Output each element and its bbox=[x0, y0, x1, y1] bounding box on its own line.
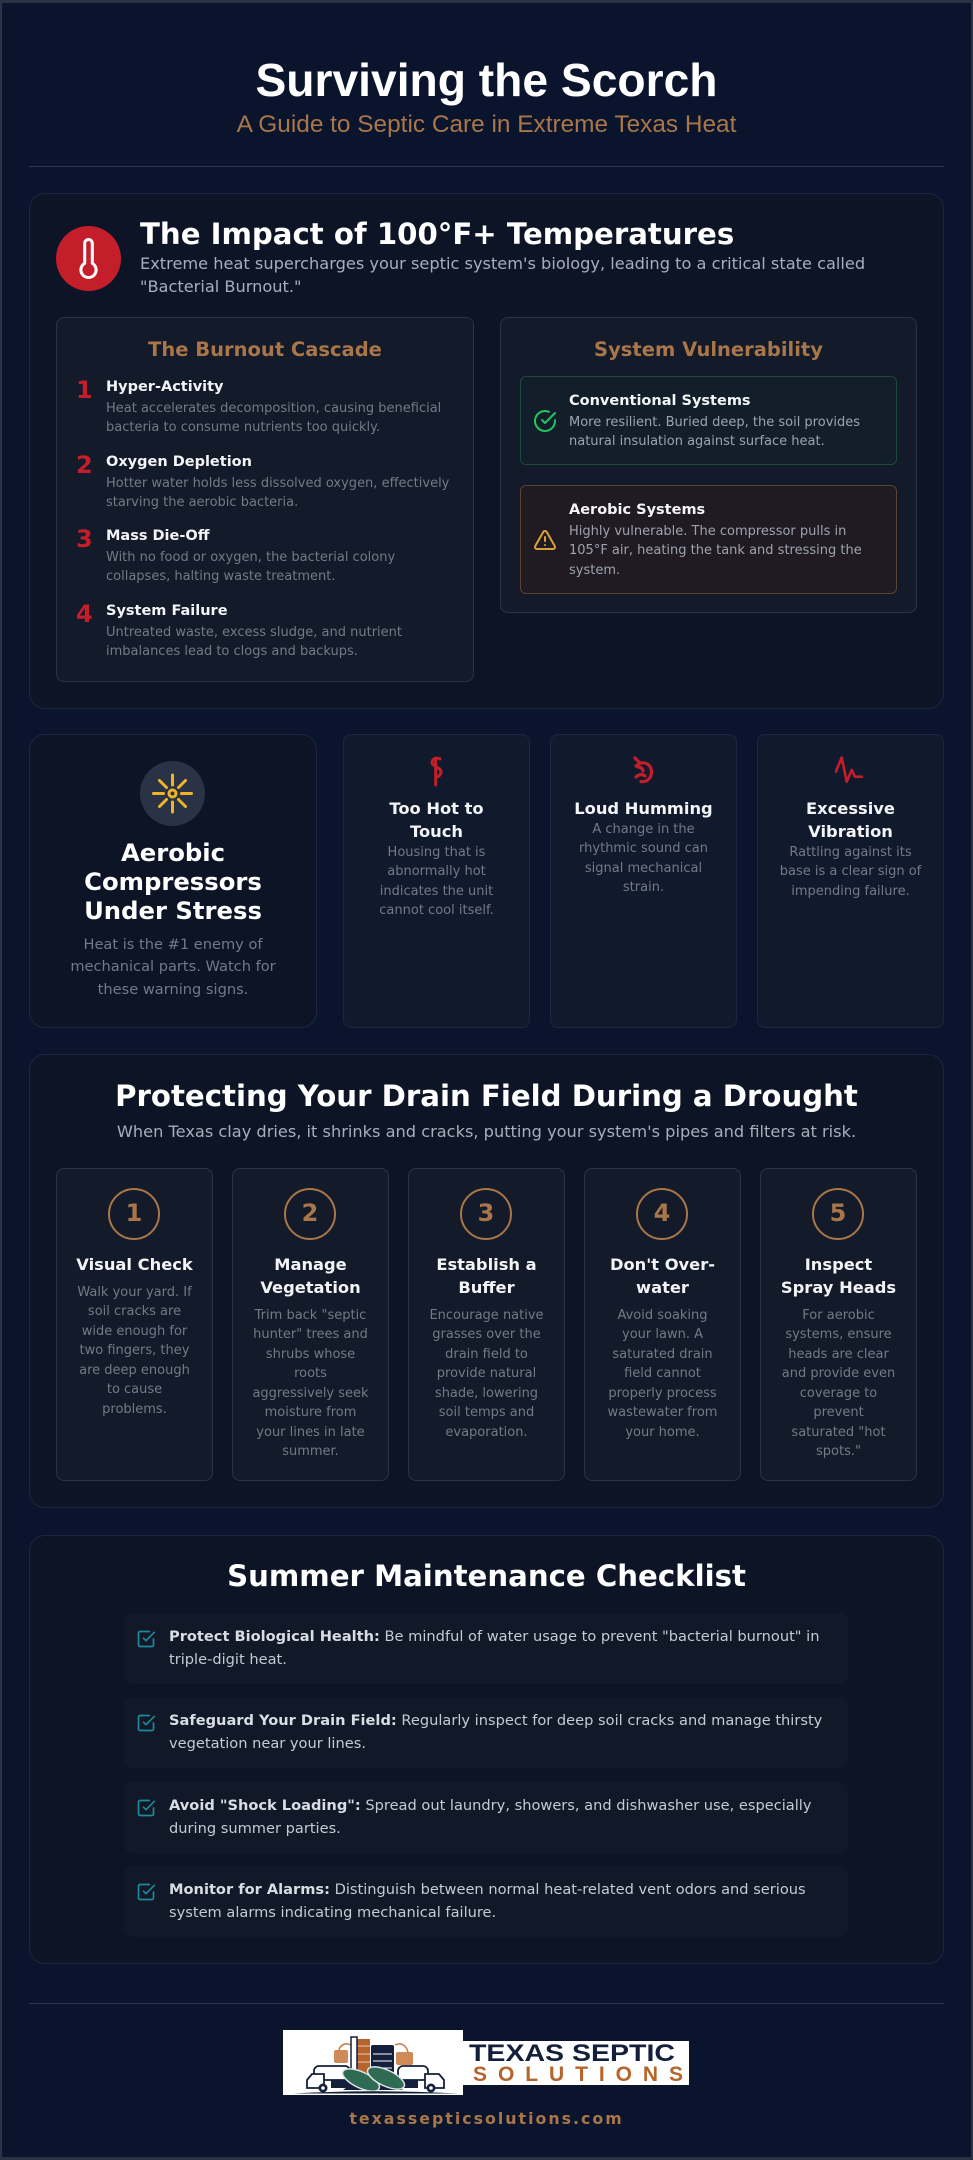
text: visual check: soil cracks are bbox=[88, 1304, 181, 1319]
checklist text: biological health: triple-digit heat. bbox=[169, 1651, 287, 1668]
number 2: 2 bbox=[302, 1199, 318, 1227]
logo wordmark box bbox=[463, 2041, 689, 2086]
number 3: 3 bbox=[478, 1199, 494, 1227]
title: too hot to touch: Too Hot to bbox=[389, 799, 484, 818]
step text: system failure bbox=[106, 624, 402, 659]
step title: mass die-off: Mass Die-Off bbox=[106, 528, 209, 544]
checklist text: alarms: system alarms indicating mechanical failure. bbox=[169, 1904, 496, 1921]
title: conventional systems: Conventional Systems bbox=[569, 392, 751, 408]
card: establish a buffer bbox=[408, 1168, 565, 1481]
text: aerobic compressors bbox=[70, 936, 276, 998]
text: aerobic systems: system. bbox=[569, 562, 620, 578]
text: too hot to touch: abnormally hot bbox=[387, 864, 486, 879]
text: don't over-water bbox=[608, 1308, 717, 1440]
logo bbox=[283, 2030, 689, 2095]
card: loud humming bbox=[550, 734, 737, 1028]
card: inspect spray heads bbox=[760, 1168, 917, 1481]
text: don't over-water: your lawn. A bbox=[622, 1327, 703, 1342]
heading: system vulnerability: System Vulnerability bbox=[594, 338, 823, 361]
title: establish a buffer: Establish a bbox=[436, 1255, 537, 1274]
number 5 bbox=[812, 1188, 864, 1240]
step text: mass die-off bbox=[106, 550, 395, 584]
step title: oxygen depletion: Oxygen Depletion bbox=[106, 454, 252, 470]
checklist row: biological health bbox=[124, 1613, 848, 1684]
checklist text: drain field: vegetation near your lines. bbox=[169, 1735, 366, 1752]
title: loud humming: Loud Humming bbox=[574, 799, 713, 818]
number 2 bbox=[284, 1188, 336, 1240]
text: excessive vibration: base is a clear sign of bbox=[780, 864, 921, 879]
step text: system failure: imbalances lead to clogs and backups. bbox=[106, 644, 358, 659]
text: establish a buffer: soil temps and bbox=[439, 1405, 534, 1420]
subheading: drain field: When Texas clay dries, it shrinks and cracks, putting your system's pipes and filters at risk. bbox=[117, 1122, 856, 1141]
checklist text: biological health bbox=[169, 1628, 819, 1668]
step text: hyper-activity: bacteria to consume nutrients too quickly. bbox=[106, 420, 380, 435]
text: manage vegetation: aggressively seek bbox=[252, 1386, 369, 1400]
text: manage vegetation: your lines in late bbox=[256, 1424, 365, 1440]
title: excessive vibration bbox=[806, 799, 895, 841]
heading: checklist: Summer Maintenance Checklist bbox=[227, 1559, 746, 1593]
title: don't over-water: Don't Over- bbox=[610, 1255, 715, 1274]
logo wordmark box: TEXAS SEPTIC bbox=[469, 2041, 675, 2067]
checklist text: shock loading: Avoid "Shock Loading": Spread out laundry, showers, and dishwasher use, especially bbox=[169, 1797, 812, 1814]
intro text: "Bacterial Burnout." bbox=[140, 277, 302, 296]
title: aerobic systems: Aerobic Systems bbox=[569, 502, 705, 518]
website url: texassepticsolutions.com bbox=[349, 2109, 624, 2128]
heading: impact: The Impact of 100°F+ Temperatures bbox=[140, 217, 734, 251]
heading: aerobic compressors bbox=[84, 838, 262, 925]
text: conventional systems: natural insulation against surface heat. bbox=[569, 434, 825, 449]
step title: hyper-activity: Hyper-Activity bbox=[106, 379, 224, 395]
number 4 bbox=[636, 1188, 688, 1240]
icon: check circle bbox=[534, 410, 556, 432]
checklist text: alarms: Monitor for Alarms: Distinguish between normal heat-related vent odors and serious bbox=[169, 1881, 806, 1898]
text: conventional systems bbox=[569, 414, 860, 449]
text: visual check: to cause bbox=[107, 1382, 162, 1397]
title: excessive vibration: Vibration bbox=[808, 822, 893, 841]
text: too hot to touch bbox=[379, 844, 494, 918]
card: too hot to touch bbox=[343, 734, 530, 1028]
number 4: 4 bbox=[654, 1199, 670, 1227]
intro text: Extreme heat supercharges your septic system's biology, leading to a critical state called bbox=[140, 254, 865, 273]
text: establish a buffer: grasses over the bbox=[432, 1327, 541, 1342]
checklist text: drain field: Safeguard Your Drain Field: Regularly inspect for deep soil cracks and manage thirsty bbox=[169, 1712, 822, 1729]
icon: vibration pulse bbox=[835, 756, 863, 783]
text: inspect spray heads bbox=[782, 1308, 895, 1459]
icon: checkbox 3 bbox=[138, 1800, 156, 1816]
title: too hot to touch: Touch bbox=[410, 822, 463, 841]
subtitle: A Guide to Septic Care in Extreme Texas Heat bbox=[237, 111, 736, 138]
text: visual check: two fingers, they bbox=[80, 1343, 189, 1358]
icon: checkbox 1 bbox=[138, 1630, 156, 1648]
text: manage vegetation bbox=[252, 1308, 369, 1459]
text: establish a buffer: drain field to bbox=[445, 1346, 528, 1362]
text: visual check: are deep enough bbox=[79, 1362, 190, 1378]
card: manage vegetation bbox=[232, 1168, 389, 1481]
checklist text: shock loading: during summer parties. bbox=[169, 1820, 341, 1837]
step text: hyper-activity bbox=[106, 400, 441, 435]
text: don't over-water: saturated drain bbox=[612, 1346, 713, 1362]
title: manage vegetation: Vegetation bbox=[260, 1278, 361, 1297]
checklist row: drain field bbox=[124, 1697, 848, 1768]
text: aerobic systems: Highly vulnerable. The compressor pulls in bbox=[569, 524, 846, 538]
number 5: 5 bbox=[830, 1199, 846, 1227]
text: loud humming: rhythmic sound can bbox=[579, 841, 708, 856]
checklist text: biological health: Protect Biological Health: Be mindful of water usage to prevent "bacterial burnout" in bbox=[169, 1628, 819, 1645]
text: inspect spray heads: spots." bbox=[816, 1444, 861, 1459]
title: don't over-water: water bbox=[636, 1278, 689, 1297]
text: don't over-water: properly process bbox=[608, 1386, 717, 1400]
card: excessive vibration bbox=[757, 734, 944, 1028]
panel: drain field bbox=[29, 1054, 944, 1508]
text: establish a buffer: evaporation. bbox=[445, 1424, 528, 1440]
step number 1: 1 bbox=[76, 376, 93, 404]
text: establish a buffer: shade, lowering bbox=[435, 1386, 538, 1400]
text: excessive vibration: Rattling against its bbox=[789, 844, 912, 860]
checklist row: shock loading bbox=[124, 1782, 848, 1853]
step number 3: 3 bbox=[76, 525, 93, 553]
text: don't over-water: Avoid soaking bbox=[617, 1308, 708, 1322]
title: establish a buffer bbox=[436, 1255, 537, 1297]
text: manage vegetation: shrubs whose bbox=[266, 1346, 355, 1362]
text: aerobic systems: 105°F air, heating the tank and stressing the bbox=[569, 543, 862, 558]
panel: aerobic compressors bbox=[29, 734, 317, 1028]
text: don't over-water: your home. bbox=[625, 1424, 700, 1440]
step title: system failure: System Failure bbox=[106, 603, 228, 619]
step text: oxygen depletion bbox=[106, 476, 449, 510]
text: loud humming: signal mechanical bbox=[585, 860, 702, 876]
text: don't over-water: wastewater from bbox=[608, 1405, 717, 1420]
text: inspect spray heads: coverage to bbox=[800, 1386, 877, 1400]
logo illustration box bbox=[283, 2030, 463, 2096]
card: visual check bbox=[56, 1168, 213, 1481]
icon: thermometer bbox=[56, 226, 121, 291]
heading: aerobic compressors: Compressors bbox=[84, 867, 262, 896]
checklist text: alarms bbox=[169, 1881, 806, 1921]
title: manage vegetation: Manage bbox=[274, 1255, 347, 1274]
panel: impact of temperatures bbox=[29, 193, 944, 709]
number 1 bbox=[108, 1188, 160, 1240]
text: visual check: Walk your yard. If bbox=[77, 1284, 192, 1300]
text: manage vegetation: summer. bbox=[282, 1444, 339, 1459]
heading: drain field: Protecting Your Drain Field During a Drought bbox=[115, 1079, 858, 1113]
text: conventional systems: More resilient. Buried deep, the soil provides bbox=[569, 414, 860, 430]
panel: system vulnerability bbox=[500, 317, 917, 613]
panel: checklist bbox=[29, 1535, 944, 1964]
title: don't over-water bbox=[610, 1255, 715, 1297]
text: aerobic compressors: these warning signs. bbox=[98, 981, 248, 998]
step text: system failure: Untreated waste, excess sludge, and nutrient bbox=[106, 624, 402, 640]
text: visual check: problems. bbox=[102, 1402, 167, 1416]
text: inspect spray heads: For aerobic bbox=[802, 1308, 875, 1322]
title: establish a buffer: Buffer bbox=[458, 1278, 515, 1297]
text: loud humming bbox=[579, 822, 708, 895]
step number 2: 2 bbox=[76, 451, 93, 479]
text: inspect spray heads: systems, ensure bbox=[785, 1327, 892, 1342]
icon: hot symbol bbox=[430, 756, 442, 786]
text: aerobic compressors: mechanical parts. Watch for bbox=[70, 958, 276, 975]
card: aerobic systems bbox=[520, 485, 897, 594]
text: visual check bbox=[77, 1284, 192, 1416]
checklist text: shock loading bbox=[169, 1797, 812, 1837]
title: visual check: Visual Check bbox=[76, 1255, 193, 1274]
checklist text: drain field bbox=[169, 1712, 822, 1752]
text: aerobic compressors: Heat is the #1 enemy of bbox=[83, 936, 263, 952]
text: don't over-water: field cannot bbox=[624, 1366, 701, 1381]
text: establish a buffer bbox=[429, 1308, 544, 1440]
title: too hot to touch bbox=[389, 799, 484, 841]
number 1: 1 bbox=[126, 1199, 142, 1227]
logo wordmark box: SOLUTIONS bbox=[473, 2063, 683, 2086]
intro text bbox=[140, 254, 865, 296]
step text: mass die-off: collapses, halting waste treatment. bbox=[106, 569, 335, 584]
text: excessive vibration: impending failure. bbox=[791, 884, 910, 898]
text: manage vegetation: hunter" trees and bbox=[253, 1327, 368, 1342]
text: manage vegetation: moisture from bbox=[265, 1405, 356, 1420]
card: conventional systems bbox=[520, 376, 897, 465]
text: inspect spray heads: heads are clear bbox=[788, 1346, 889, 1362]
title: excessive vibration: Excessive bbox=[806, 799, 895, 818]
icon: sun bbox=[140, 761, 205, 826]
heading: aerobic compressors: Under Stress bbox=[84, 896, 262, 925]
text: establish a buffer: provide natural bbox=[437, 1366, 536, 1381]
text: inspect spray heads: and provide even bbox=[782, 1366, 895, 1381]
text: loud humming: A change in the bbox=[592, 822, 695, 836]
text: manage vegetation: roots bbox=[294, 1366, 327, 1381]
text: excessive vibration bbox=[780, 844, 922, 898]
step text: oxygen depletion: starving the aerobic bacteria. bbox=[106, 495, 298, 510]
step text: mass die-off: With no food or oxygen, the bacterial colony bbox=[106, 550, 395, 564]
text: manage vegetation: Trim back "septic bbox=[255, 1308, 366, 1322]
text: too hot to touch: Housing that is bbox=[388, 844, 485, 860]
text: aerobic systems bbox=[569, 524, 862, 578]
title: inspect spray heads bbox=[781, 1255, 896, 1297]
icon: checkbox 4 bbox=[138, 1884, 156, 1900]
title: manage vegetation bbox=[260, 1255, 361, 1297]
icon: checkbox 2 bbox=[138, 1714, 156, 1732]
checklist row: alarms bbox=[124, 1866, 848, 1937]
title: Surviving the Scorch bbox=[256, 54, 718, 106]
text: too hot to touch: indicates the unit bbox=[380, 884, 493, 898]
panel: burnout cascade bbox=[56, 317, 474, 682]
card: don't over-water bbox=[584, 1168, 741, 1481]
icon: warning triangle bbox=[534, 530, 556, 550]
icon: humming bbox=[633, 756, 654, 784]
title: inspect spray heads: Inspect bbox=[805, 1255, 872, 1274]
text: inspect spray heads: saturated "hot bbox=[791, 1424, 886, 1440]
text: establish a buffer: Encourage native bbox=[429, 1308, 544, 1322]
heading: burnout cascade: The Burnout Cascade bbox=[148, 338, 382, 361]
text: too hot to touch: cannot cool itself. bbox=[379, 903, 494, 918]
heading: aerobic compressors: Aerobic bbox=[121, 838, 225, 867]
step number 4: 4 bbox=[76, 600, 93, 628]
text: inspect spray heads: prevent bbox=[813, 1405, 864, 1420]
step text: hyper-activity: Heat accelerates decomposition, causing beneficial bbox=[106, 400, 441, 416]
step text: oxygen depletion: Hotter water holds less dissolved oxygen, effectively bbox=[106, 476, 449, 490]
text: loud humming: strain. bbox=[623, 880, 664, 895]
number 3 bbox=[460, 1188, 512, 1240]
text: visual check: wide enough for bbox=[82, 1324, 187, 1338]
title: inspect spray heads: Spray Heads bbox=[781, 1278, 896, 1297]
